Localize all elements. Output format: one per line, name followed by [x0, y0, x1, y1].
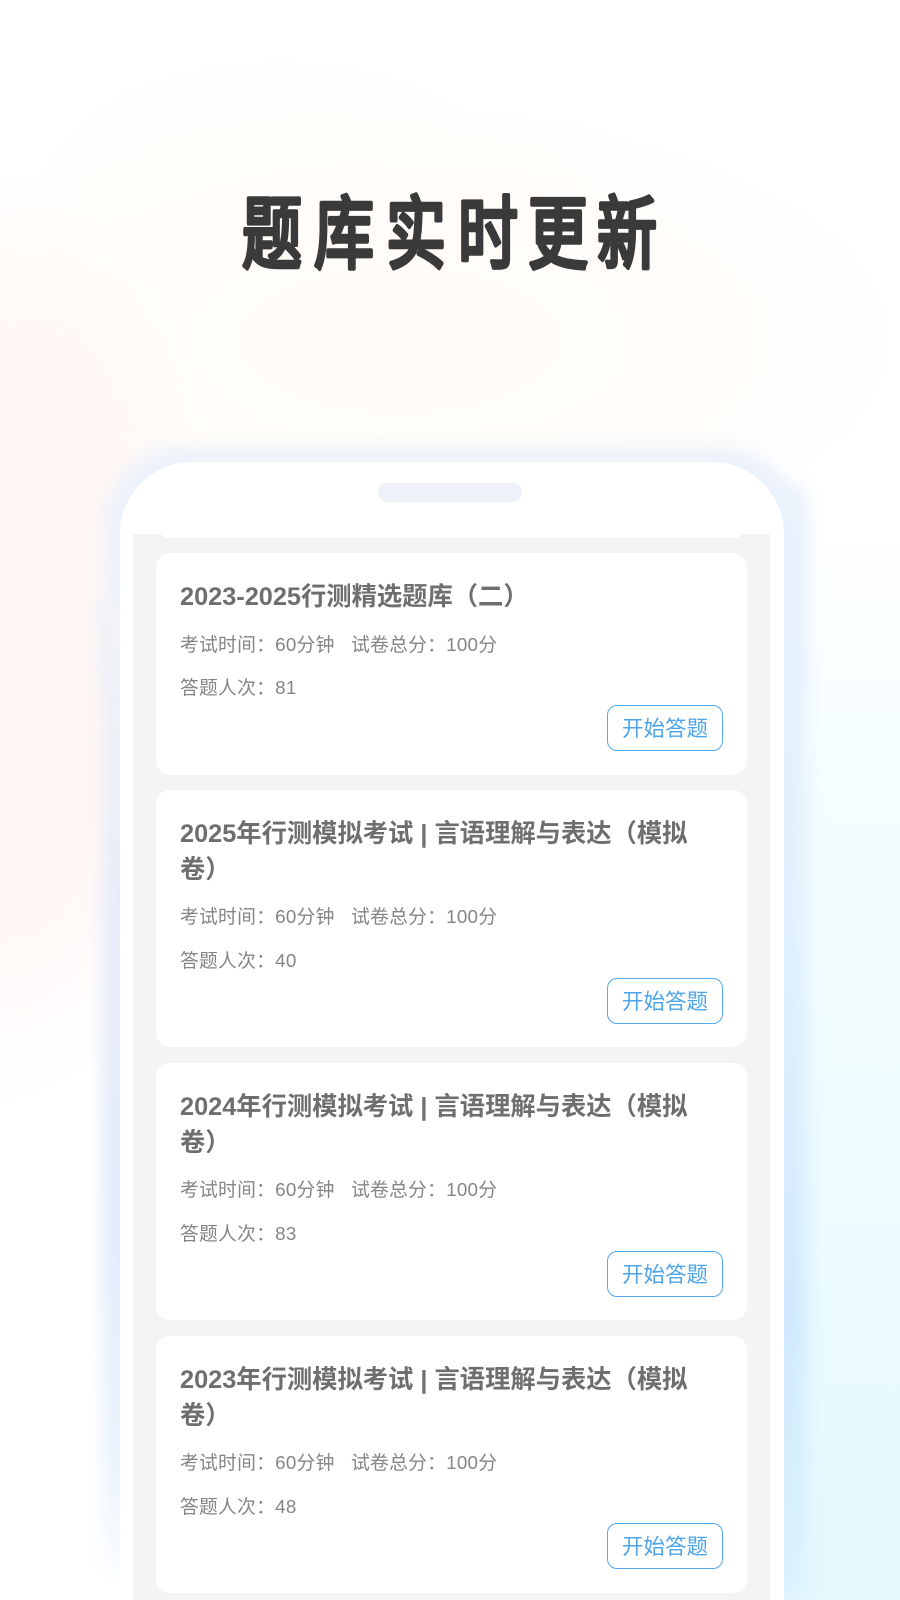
card 2 title: 2025年行测模拟考试 | 言语理解与表达（模拟卷）: [180, 820, 687, 884]
card 2 button: 开始答题: [622, 990, 708, 1014]
title: 更: [528, 170, 588, 286]
title: 实: [386, 170, 446, 286]
title: 新: [597, 170, 657, 286]
card 3 attempts: 答题人次：83: [180, 1219, 297, 1246]
card 2: [156, 790, 747, 1047]
card 4 title: 2023年行测模拟考试 | 言语理解与表达（模拟卷）: [180, 1366, 687, 1430]
card 3 title: 2024年行测模拟考试 | 言语理解与表达（模拟卷）: [180, 1093, 687, 1157]
card 1 title: 2023-2025行测精选题库（二）: [180, 583, 529, 611]
card 2 exam info: 考试时间：60分钟 试卷总分：100分: [180, 902, 497, 929]
phone frame: [120, 462, 784, 1600]
card 3 button: 开始答题: [622, 1263, 708, 1287]
card 4 button: 开始答题: [622, 1535, 708, 1559]
phone speaker pill: [378, 483, 522, 502]
title: 库: [314, 170, 374, 286]
card 1 attempts: 答题人次：81: [180, 673, 297, 700]
card 2 attempts: 答题人次：40: [180, 946, 297, 973]
card 3: [156, 1063, 747, 1320]
phone screen: [133, 534, 770, 1600]
card 1: [156, 553, 747, 775]
card 4: [156, 1336, 747, 1593]
card 1 button: 开始答题: [622, 717, 708, 741]
title: 时: [458, 170, 518, 286]
card 4 attempts: 答题人次：48: [180, 1492, 297, 1519]
card 2 button: [607, 978, 723, 1024]
card 1 exam info: 考试时间：60分钟 试卷总分：100分: [180, 630, 497, 657]
card 3 button: [607, 1251, 723, 1297]
previous card remnant: [160, 530, 743, 538]
card 4 button: [607, 1523, 723, 1569]
card 4 exam info: 考试时间：60分钟 试卷总分：100分: [180, 1448, 497, 1475]
card 1 button: [607, 705, 723, 751]
title: [242, 170, 657, 286]
card 3 exam info: 考试时间：60分钟 试卷总分：100分: [180, 1175, 497, 1202]
title: 题: [242, 170, 302, 286]
